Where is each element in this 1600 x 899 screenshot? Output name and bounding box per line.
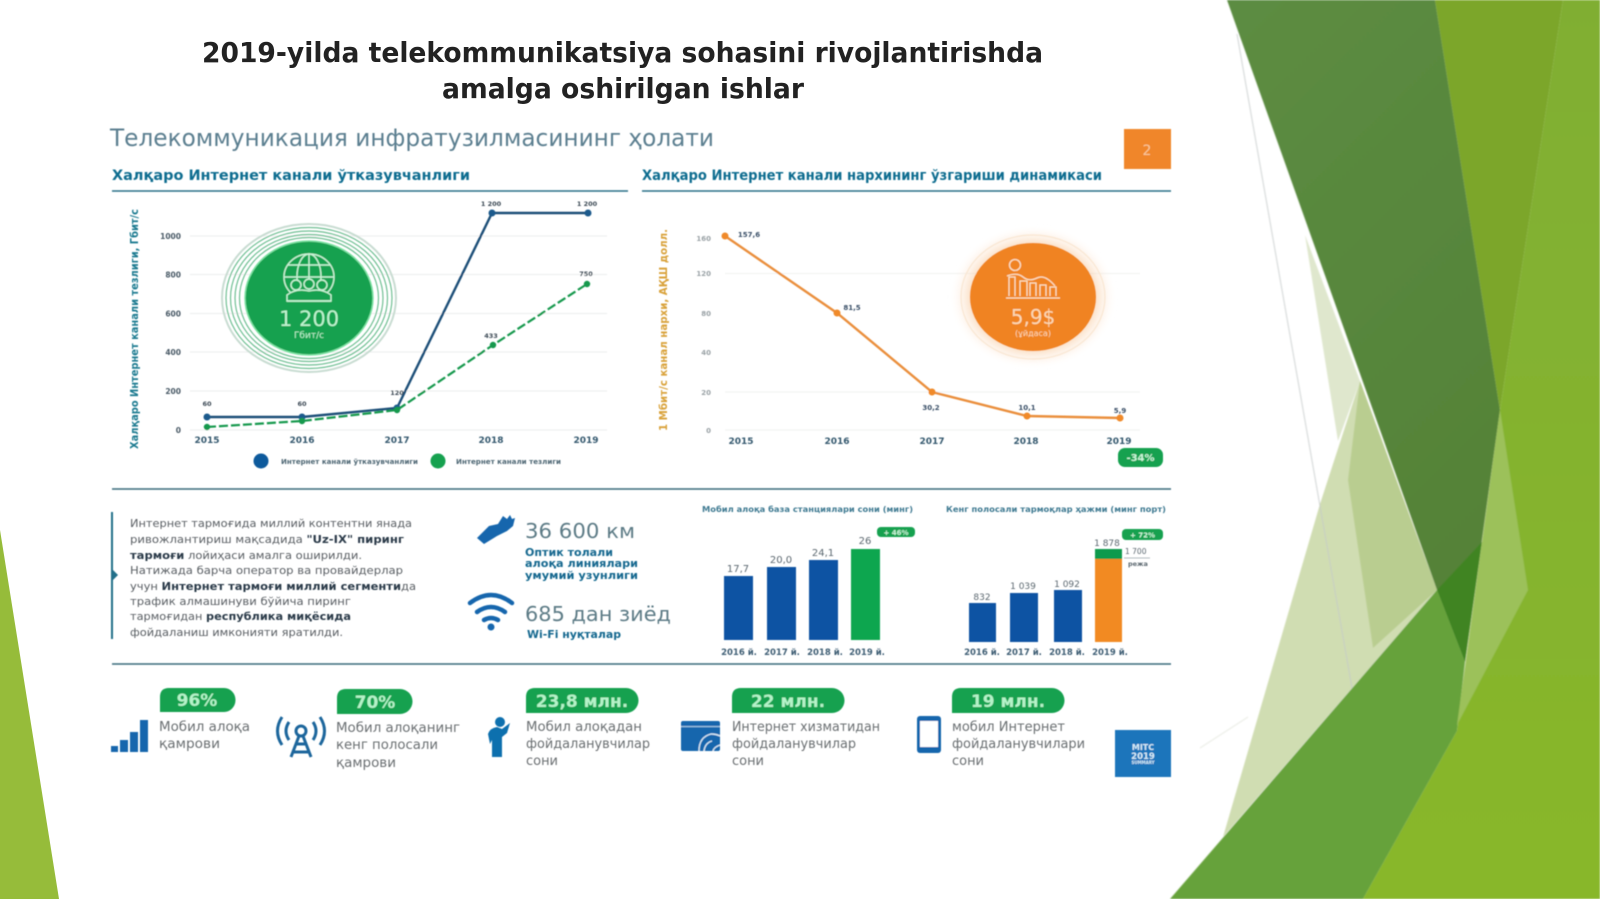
data labels: 5,9 xyxy=(1114,407,1126,415)
stat: 22 million internet users: 22 млн. xyxy=(751,692,825,712)
bar chart: broadband ports: 1 039 xyxy=(1010,582,1036,592)
stat: optical fibre length: алоқа линиялари xyxy=(525,558,638,570)
bar chart: mobile base stations: 17,7 xyxy=(727,564,749,575)
panel: Uz-IX text block: фойдаланиш имконияти яратилди. xyxy=(130,626,343,639)
panel: Uz-IX text block: трафик алмашинуви бўйича пиринг xyxy=(130,595,351,608)
x axis labels: 2017 xyxy=(919,437,945,447)
stat: 23.8 million mobile users: фойдаланувчилар xyxy=(526,737,650,752)
legend xyxy=(254,454,561,468)
bar chart: mobile base stations: 20,0 xyxy=(770,555,792,566)
x axis labels: 2018 xyxy=(478,436,504,446)
data labels: 1 200 xyxy=(481,200,502,208)
panel: Uz-IX text block: Натижада барча оператор ва провайдерлар xyxy=(130,564,403,577)
x axis labels: 2015 xyxy=(194,436,220,446)
stat: 70% broadband coverage: Мобил алоқанинг xyxy=(336,721,460,736)
stat: 22 million internet users: сони xyxy=(732,754,764,769)
y axis labels xyxy=(696,235,711,435)
badge: minus 34 percent: -34% xyxy=(1126,453,1155,464)
bar chart: mobile base stations: 2016 й. xyxy=(721,648,757,658)
bar chart: broadband ports: 1 700 xyxy=(1125,547,1147,556)
stat: wi-fi points: Wi-Fi нуқталар xyxy=(527,629,622,641)
x axis labels: 2019 xyxy=(1106,437,1132,447)
title: amalga oshirilgan ishlar xyxy=(442,72,804,105)
panel: Uz-IX text block: учун Интернет тармоғи миллий сегменти да xyxy=(130,580,416,593)
icon: radio tower xyxy=(278,717,324,757)
heading: price: Халқаро Интернет канали нархининг ўзгариши динамикаси xyxy=(642,168,1102,184)
panel: channel capacity line chart xyxy=(112,168,628,468)
growth badge: + 46% xyxy=(883,529,909,537)
stat: 96% mobile coverage: қамрови xyxy=(159,737,220,752)
panel: Uz-IX text block: Интернет тармоғида миллий контентни янада xyxy=(130,517,412,530)
stat: 19 million mobile internet users: 19 млн. xyxy=(971,692,1045,712)
green dashed line: speed xyxy=(204,281,590,430)
data labels: 157,6 xyxy=(738,231,760,239)
badge: 1200 Gbit/s: Гбит/с xyxy=(294,331,324,341)
stat: 19 million mobile internet users: фойдаланувчилари xyxy=(952,737,1085,752)
bar chart: broadband ports: 2018 й. xyxy=(1049,648,1085,658)
x axis labels: 2017 xyxy=(384,436,410,446)
bar chart: broadband ports: 2016 й. xyxy=(964,648,1000,658)
y axis labels: 40 xyxy=(701,349,711,357)
bar chart: mobile base stations: Мобил алоқа база станциялари сони (минг) xyxy=(702,504,913,514)
data labels xyxy=(202,200,598,408)
icon: signal bars xyxy=(111,720,148,752)
y axis labels: 20 xyxy=(701,389,711,397)
y axis labels: 80 xyxy=(701,310,711,318)
x axis labels: 2019 xyxy=(573,436,599,446)
icon: fibre cable xyxy=(477,515,515,544)
data labels: 750 xyxy=(579,270,593,278)
legend: Интернет канали тезлиги xyxy=(456,458,561,466)
badge: 5.9 dollars: (ұйдаса) xyxy=(1015,329,1051,338)
stat: 23.8 million mobile users: Мобил алоқадан xyxy=(526,720,642,735)
badge: minus 34 percent xyxy=(1118,448,1163,467)
data labels: 81,5 xyxy=(843,304,861,312)
stat: optical fibre length: Оптик толали xyxy=(525,547,613,559)
stat: 23.8 million mobile users: сони xyxy=(526,754,558,769)
stat: 70% broadband coverage: 70% xyxy=(355,693,395,713)
x axis labels xyxy=(194,436,599,446)
bar chart: broadband ports: 2019 й. xyxy=(1092,648,1128,658)
decorative background: right green facets xyxy=(1170,0,1600,899)
panel: Uz-IX text block: тармоғи лойиҳаси амалга оширилди. xyxy=(130,549,362,562)
badge: 1200 Gbit/s xyxy=(222,224,396,372)
data labels: 1 200 xyxy=(577,200,598,208)
page number badge: 2 xyxy=(1143,143,1151,159)
title xyxy=(202,36,1043,105)
bar chart: broadband ports xyxy=(946,505,1166,658)
bar chart: mobile base stations: 2017 й. xyxy=(764,648,800,658)
data labels: 120 xyxy=(390,389,404,397)
y axis labels: 160 xyxy=(696,235,711,243)
stat: optical fibre length xyxy=(477,515,638,582)
growth badge: + 72% xyxy=(1130,532,1155,540)
x axis labels: 2016 xyxy=(824,437,850,447)
y axis labels: 400 xyxy=(165,348,181,357)
stat: optical fibre length: 36 600 км xyxy=(525,519,635,543)
stat: 96% mobile coverage: 96% xyxy=(177,691,217,711)
growth badge xyxy=(1122,529,1163,540)
panel: channel price line chart xyxy=(642,168,1171,467)
logo: MITC 2019: SUMMARY xyxy=(1132,760,1155,765)
data labels xyxy=(738,231,1126,415)
data labels: 10,1 xyxy=(1018,404,1036,412)
icon: browser with globe xyxy=(681,721,720,751)
x axis labels: 2018 xyxy=(1013,437,1039,447)
logo: MITC 2019 xyxy=(1115,730,1171,777)
bar chart: broadband ports: 1 878 xyxy=(1094,539,1120,549)
icon: falling price bars xyxy=(1006,260,1060,298)
axis title: 1 Мбит/с канал нархи, АҚШ долл. xyxy=(658,229,670,431)
stat: 70% broadband coverage: қамрови xyxy=(336,756,396,771)
stat: 23.8 million mobile users: 23,8 млн. xyxy=(536,692,628,712)
stat: 19 million mobile internet users xyxy=(917,688,1085,769)
stat: wi-fi points: 685 дан зиёд xyxy=(525,602,671,626)
title: 2019-yilda telekommunikatsiya sohasini rivojlantirishda xyxy=(202,36,1043,69)
bar chart: mobile base stations: 24,1 xyxy=(812,548,834,559)
y axis labels xyxy=(160,232,181,435)
stat: 19 million mobile internet users: мобил Интернет xyxy=(952,720,1065,735)
axis title: Халқаро Интернет канали тезлиги, Гбит/с xyxy=(129,209,141,449)
data labels: 433 xyxy=(484,332,498,340)
x axis labels xyxy=(728,437,1132,447)
decorative background: left green triangle xyxy=(0,530,59,899)
bar chart: broadband ports: 832 xyxy=(973,593,991,603)
bar chart: mobile base stations: 2018 й. xyxy=(807,648,843,658)
icon: globe with people xyxy=(284,254,334,301)
badge: 5.9 dollars xyxy=(948,224,1118,370)
bar chart: broadband ports: Кенг полосали тармоқлар ҳажми (минг порт) xyxy=(946,505,1166,514)
stat: 22 million internet users: фойдаланувчилар xyxy=(732,737,856,752)
logo: MITC 2019: MITC xyxy=(1132,743,1154,752)
bar chart: broadband ports: режа xyxy=(1128,560,1148,568)
y axis labels: 0 xyxy=(176,426,181,435)
bar chart: mobile base stations xyxy=(702,504,915,658)
data labels: 30,2 xyxy=(922,404,940,412)
logo: MITC 2019: 2019 xyxy=(1131,752,1155,762)
icon: person with phone xyxy=(488,717,510,757)
data labels: 60 xyxy=(202,400,212,408)
data labels: 60 xyxy=(297,400,307,408)
stat: wi-fi points xyxy=(470,595,671,641)
panel: Uz-IX text block: тармоғидан республика миқёсида xyxy=(130,610,351,623)
x axis labels: 2015 xyxy=(728,437,754,447)
bar chart: mobile base stations: 2019 й. xyxy=(849,648,885,658)
stat: 96% mobile coverage: Мобил алоқа xyxy=(159,720,250,735)
stat: 19 million mobile internet users: сони xyxy=(952,754,984,769)
y axis labels: 800 xyxy=(165,270,181,280)
y axis labels: 120 xyxy=(696,270,711,278)
stat: optical fibre length: умумий узунлиги xyxy=(525,570,638,582)
icon: wi-fi xyxy=(470,595,512,630)
stat: 70% broadband coverage: кенг полосали xyxy=(336,738,438,753)
y axis labels: 600 xyxy=(165,310,181,318)
legend: Интернет канали ўтказувчанлиги xyxy=(281,458,418,466)
page number badge xyxy=(1124,129,1171,169)
x axis labels: 2016 xyxy=(289,436,315,446)
bar chart: broadband ports: 1 092 xyxy=(1054,580,1080,590)
growth badge xyxy=(877,527,915,537)
stat: 96% mobile coverage xyxy=(111,688,250,752)
infographic slide xyxy=(109,124,1171,777)
badge: 5.9 dollars: 5,9$ xyxy=(1011,305,1055,329)
panel: Uz-IX text block xyxy=(112,512,416,639)
panel: Uz-IX text block: ривожлантириш мақсадида "Uz-IX" пиринг xyxy=(130,533,404,546)
stat: 22 million internet users: Интернет хизматидан xyxy=(732,720,880,735)
blue line: capacity xyxy=(204,210,592,420)
heading: capacity: Халқаро Интернет канали ўтказувчанлиги xyxy=(112,168,470,184)
y axis labels: 1000 xyxy=(160,232,181,241)
stat: 22 million internet users xyxy=(681,688,880,769)
orange line: price xyxy=(722,232,1124,422)
badge: 1200 Gbit/s: 1 200 xyxy=(279,307,339,331)
icon: smartphone xyxy=(917,716,941,753)
subtitle: Телекоммуникация инфратузилмасининг ҳолати xyxy=(109,124,714,152)
stat: 23.8 million mobile users xyxy=(488,688,650,769)
y axis labels: 200 xyxy=(165,387,181,396)
stat: 70% broadband coverage xyxy=(278,689,460,771)
bar chart: broadband ports: 2017 й. xyxy=(1006,648,1042,658)
bar chart: mobile base stations: 26 xyxy=(859,536,871,547)
y axis labels: 0 xyxy=(706,427,711,435)
